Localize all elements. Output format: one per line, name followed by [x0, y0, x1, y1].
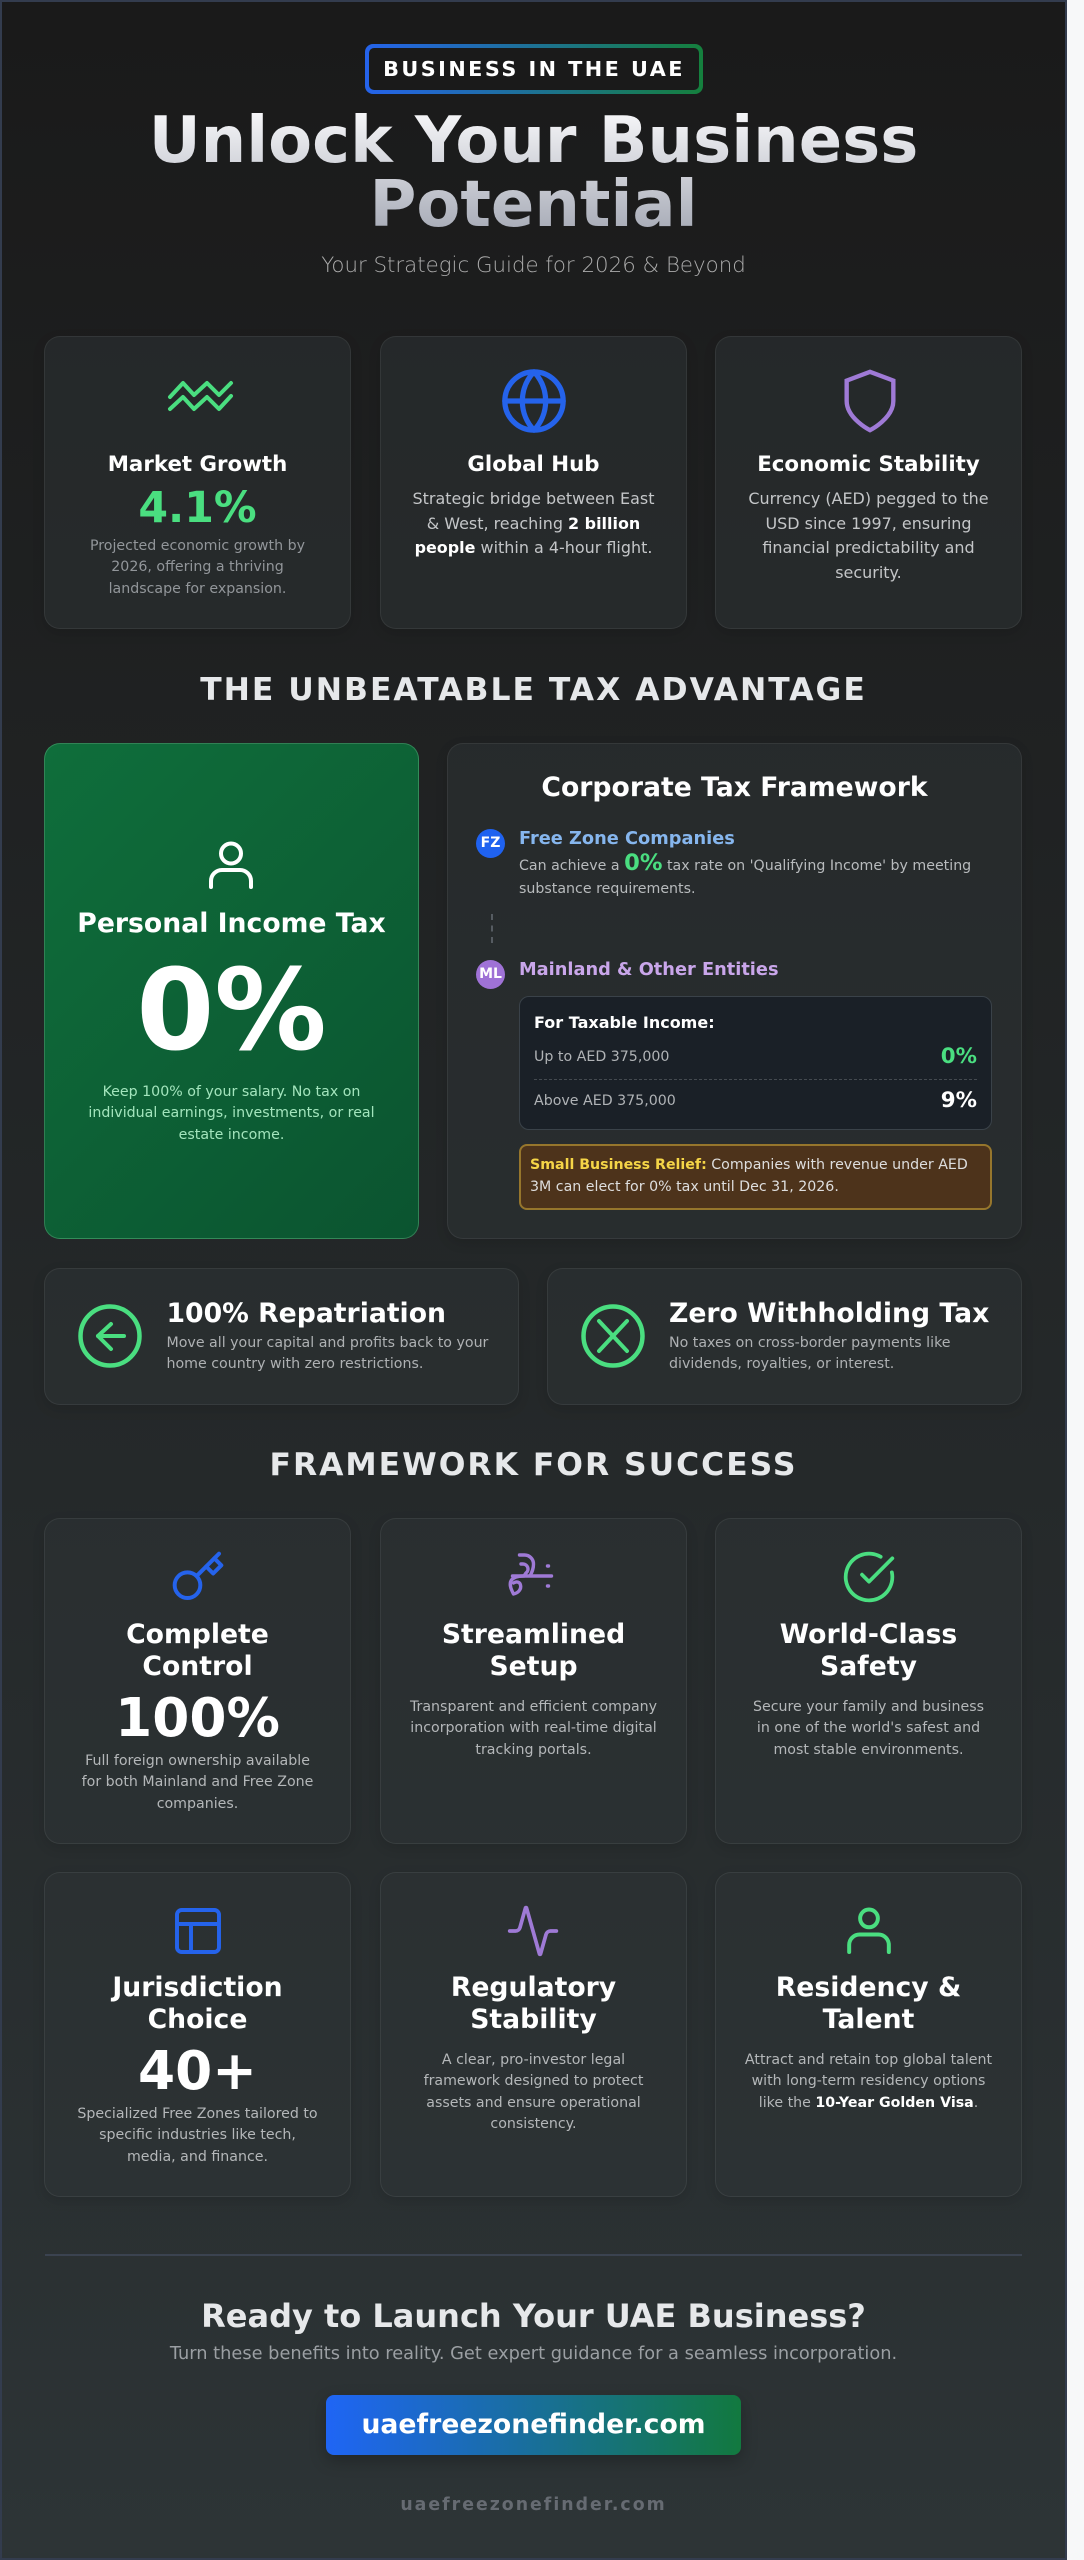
- heading: framework for success: FRAMEWORK FOR SUCCESS: [270, 1447, 797, 1483]
- heading: the unbeatable tax advantage: THE UNBEATABLE TAX ADVANTAGE: [200, 672, 867, 708]
- text: repatriation description: Move all your capital and profits back to your: [166, 1335, 488, 1351]
- text: repatriation description: [166, 1335, 488, 1372]
- panel: global hub: [380, 336, 687, 629]
- panel: regulatory stability: [380, 1872, 687, 2197]
- text: economic stability description: [748, 489, 989, 582]
- table: taxable income: [519, 996, 992, 1130]
- heading: ready to launch: Ready to Launch Your UAE Business?: [201, 2297, 866, 2335]
- label: for taxable income: For Taxable Income:: [534, 1013, 715, 1032]
- text: global hub description: people within a 4-hour flight.: [415, 538, 652, 557]
- text: residency description: like the 10-Year Golden Visa.: [759, 2095, 978, 2111]
- heading: residency and talent: [776, 1972, 961, 2035]
- text: economic stability description: financial predictability and: [762, 538, 975, 557]
- text: small business relief: Small Business Relief: Companies with revenue under AED: [530, 1157, 968, 1173]
- text: personal income tax description: [88, 1084, 375, 1143]
- text: economic stability description: USD since 1997, ensuring: [766, 514, 972, 533]
- heading: complete control: Control: [142, 1651, 253, 1682]
- text: personal income tax description: estate income.: [179, 1127, 284, 1143]
- icon: shield: [844, 370, 896, 433]
- text: streamlined description: tracking portals.: [475, 1742, 592, 1758]
- rate: 0%: 0%: [941, 1044, 977, 1069]
- text: free zone description: substance requirements.: [519, 880, 696, 896]
- text: market growth description: landscape for expansion.: [109, 581, 286, 597]
- heading: regulatory stability: Stability: [470, 2004, 597, 2035]
- icon: person: [209, 842, 253, 889]
- heading: zero withholding tax: Zero Withholding Tax: [669, 1298, 989, 1329]
- text: market growth description: Projected economic growth by: [90, 538, 305, 554]
- heading: complete control: [126, 1619, 269, 1682]
- icon: key: [172, 1552, 224, 1600]
- heading: mainland and other entities: Mainland & Other Entities: [519, 960, 779, 980]
- icon: layout panels: [175, 1908, 221, 1954]
- text: personal income tax description: individual earnings, investments, or real: [88, 1105, 375, 1121]
- text: jurisdiction description: media, and finance.: [127, 2149, 268, 2165]
- badge: business in the uae: BUSINESS IN THE UAE: [383, 57, 685, 81]
- text: complete control description: for both Mainland and Free Zone: [82, 1774, 313, 1790]
- text: safety description: most stable environments.: [773, 1742, 964, 1758]
- heading: economic stability: Economic Stability: [757, 452, 980, 477]
- panel: streamlined setup: [380, 1518, 687, 1844]
- text: jurisdiction description: specific industries like tech,: [99, 2127, 296, 2143]
- rate: 9%: 9%: [941, 1088, 977, 1113]
- text: withholding description: No taxes on cross-border payments like: [669, 1335, 951, 1351]
- badge: ML: ML: [479, 966, 502, 982]
- text: complete control description: Full foreign ownership available: [85, 1753, 310, 1769]
- footer: website: uaefreezonefinder.com: [400, 2495, 667, 2515]
- text: residency description: [745, 2052, 992, 2111]
- text: market growth description: 2026, offering a thriving: [111, 559, 284, 575]
- panel: complete control: [44, 1518, 351, 1844]
- text: global hub description: & West, reaching 2 billion: [427, 514, 640, 533]
- icon: arrow in circle: [78, 1304, 142, 1368]
- stat: 40+: 40+: [138, 2039, 257, 2102]
- callout: small business relief: [519, 1144, 992, 1210]
- text: regulatory description: framework designed to protect: [424, 2073, 643, 2089]
- text: economic stability description: security.: [835, 563, 902, 582]
- heading: streamlined setup: Streamlined: [442, 1619, 625, 1650]
- text: withholding description: dividends, royalties, or interest.: [669, 1356, 894, 1372]
- title: Unlock Your Business: [149, 104, 918, 178]
- badge: FZ: [476, 829, 505, 858]
- text: safety description: in one of the world's safest and: [757, 1720, 980, 1736]
- heading: 100% repatriation: 100% Repatriation: [166, 1298, 446, 1329]
- heading: jurisdiction choice: [110, 1972, 283, 2035]
- heading: streamlined setup: Setup: [489, 1651, 578, 1682]
- heading: regulatory stability: Regulatory: [451, 1972, 616, 2003]
- text: jurisdiction description: [77, 2106, 318, 2165]
- panel: 100% repatriation: [44, 1268, 519, 1405]
- text: free zone description: Can achieve a 0% tax rate on 'Qualifying Income' by meeting: [519, 850, 971, 876]
- button: website: uaefreezonefinder.com: [361, 2409, 706, 2440]
- heading: complete control: Complete: [126, 1619, 269, 1650]
- text: complete control description: companies.: [157, 1796, 238, 1812]
- panel: personal income tax: [44, 743, 419, 1239]
- heading: residency and talent: Talent: [823, 2004, 914, 2035]
- text: streamlined description: incorporation with real-time digital: [410, 1720, 657, 1736]
- text: regulatory description: A clear, pro-investor legal: [442, 2052, 625, 2068]
- panel: zero withholding tax: [547, 1268, 1022, 1405]
- icon: zigzag waves: [168, 380, 234, 412]
- text: global hub description: [413, 489, 654, 557]
- text: economic stability description: Currency (AED) pegged to the: [748, 489, 989, 508]
- text: residency description: Attract and retain top global talent: [745, 2052, 992, 2068]
- heading: world-class safety: World-Class: [780, 1619, 957, 1650]
- text: safety description: [753, 1699, 984, 1758]
- text: regulatory description: assets and ensure operational: [426, 2095, 641, 2111]
- text: residency description: with long-term residency options: [752, 2073, 985, 2089]
- text: jurisdiction description: Specialized Free Zones tailored to: [77, 2106, 318, 2122]
- panel: economic stability: [715, 336, 1022, 629]
- heading: global hub: Global Hub: [467, 452, 600, 477]
- panel: jurisdiction choice: [44, 1872, 351, 2197]
- stat: 100%: 100%: [115, 1686, 280, 1748]
- row label: above AED 375,000: Above AED 375,000: [534, 1093, 676, 1109]
- icon: user: [847, 1908, 891, 1954]
- heading: world-class safety: Safety: [820, 1651, 917, 1682]
- heading: jurisdiction choice: Jurisdiction: [112, 1972, 283, 2003]
- text: market growth description: [90, 538, 305, 597]
- text: global hub description: Strategic bridge between East: [413, 489, 654, 508]
- icon: globe: [502, 369, 566, 433]
- text: small business relief: [530, 1157, 968, 1194]
- title: Potential: [369, 168, 698, 242]
- panel: market growth: [44, 336, 351, 629]
- heading: world-class safety: [780, 1619, 957, 1682]
- icon: x in circle: [581, 1304, 645, 1368]
- heading: streamlined setup: [442, 1619, 625, 1682]
- text: repatriation description: home country with zero restrictions.: [166, 1356, 423, 1372]
- heading: residency and talent: Residency &: [776, 1972, 961, 2003]
- heading: regulatory stability: [451, 1972, 616, 2035]
- text: withholding description: [669, 1335, 951, 1372]
- button: website: [326, 2395, 741, 2455]
- panel: residency and talent: [715, 1872, 1022, 2197]
- text: free zone description: [519, 850, 971, 896]
- panel: corporate tax framework: [447, 743, 1022, 1239]
- text: personal income tax description: Keep 100% of your salary. No tax on: [103, 1084, 360, 1100]
- stat: 4.1%: 4.1%: [138, 483, 257, 533]
- row label: up to AED 375,000: Up to AED 375,000: [534, 1049, 669, 1065]
- heading: jurisdiction choice: Choice: [148, 2004, 247, 2035]
- connector: dashed line: [491, 914, 493, 943]
- text: call to action subtitle: Turn these benefits into reality. Get expert guidance for a seamless incorporation.: [170, 2344, 897, 2364]
- title: [2, 109, 1065, 237]
- stat: 0%: 0%: [136, 946, 327, 1076]
- badge: FZ: FZ: [481, 835, 500, 851]
- heading: personal income tax: Personal Income Tax: [77, 908, 386, 939]
- text: complete control description: [82, 1753, 313, 1812]
- badge: ML: [476, 960, 505, 989]
- heading: free zone companies: Free Zone Companies: [519, 829, 735, 849]
- text: small business relief: 3M can elect for 0% tax until Dec 31, 2026.: [530, 1178, 839, 1194]
- text: regulatory description: [424, 2052, 644, 2132]
- text: streamlined description: [410, 1699, 657, 1758]
- badge: business in the uae: [365, 44, 703, 94]
- subtitle: Your Strategic Guide for 2026 & Beyond: [321, 253, 746, 278]
- panel: world-class safety: [715, 1518, 1022, 1844]
- heading: market growth: Market Growth: [108, 452, 287, 477]
- icon: check circle: [844, 1552, 894, 1602]
- text: safety description: Secure your family and business: [753, 1699, 984, 1715]
- text: regulatory description: consistency.: [490, 2116, 577, 2132]
- icon: streamlined setup: [508, 1553, 554, 1596]
- text: streamlined description: Transparent and efficient company: [410, 1699, 657, 1715]
- heading: corporate tax framework: Corporate Tax Framework: [541, 772, 928, 803]
- icon: activity pulse: [508, 1906, 558, 1956]
